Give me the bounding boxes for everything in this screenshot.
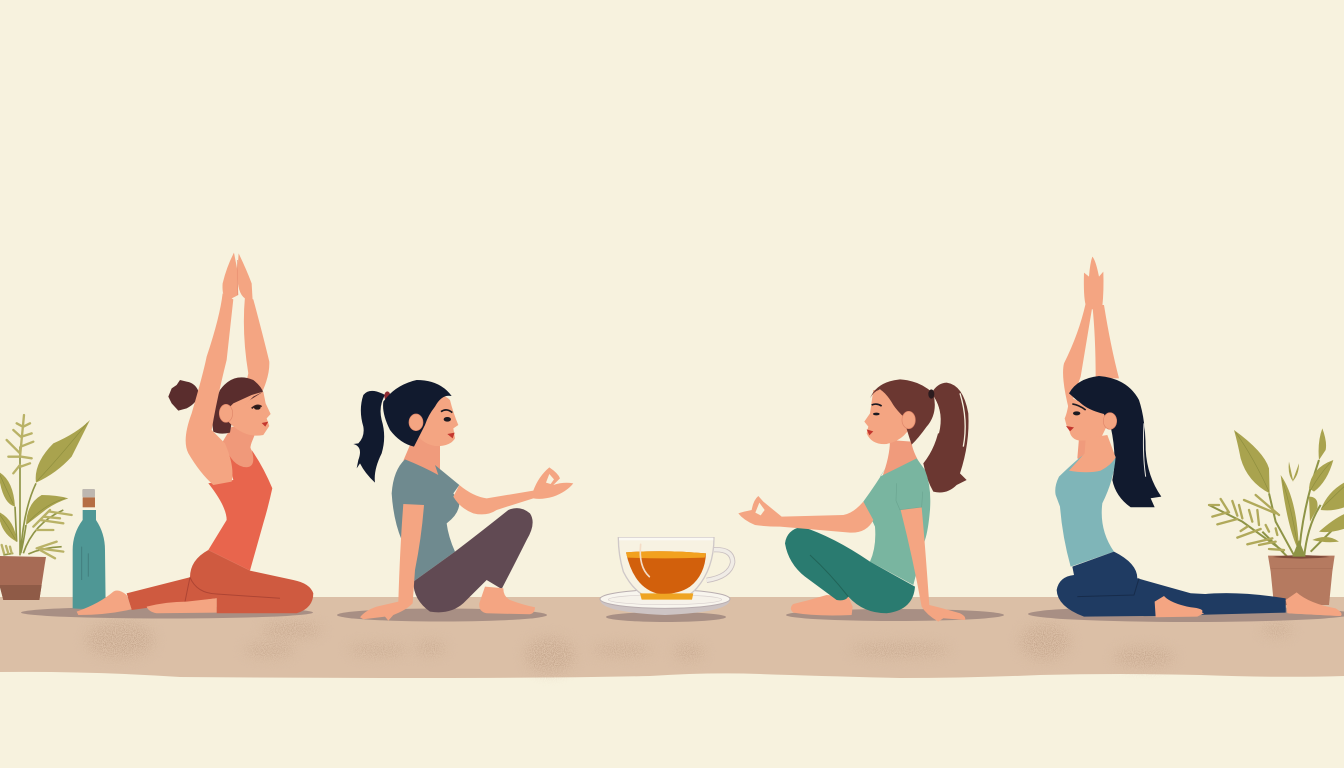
handle bbox=[707, 550, 733, 580]
neck bbox=[403, 433, 440, 480]
plant: left potted plant bbox=[0, 415, 90, 600]
blue top bbox=[1055, 450, 1116, 567]
face bbox=[1065, 397, 1107, 441]
figure 3: woman in mint shirt facing left bbox=[738, 379, 969, 622]
figure 2: woman in grey shirt facing right bbox=[353, 380, 573, 621]
near arm and hands bbox=[186, 293, 233, 485]
floor shadows bbox=[21, 606, 1344, 622]
hair bbox=[383, 380, 452, 447]
ponytail bbox=[923, 383, 969, 492]
feet bbox=[77, 591, 217, 615]
hair bbox=[870, 379, 935, 445]
leggings bbox=[413, 508, 533, 612]
neck bbox=[882, 440, 922, 478]
tea cup on saucer bbox=[600, 538, 733, 615]
floor band bbox=[0, 597, 1344, 678]
bottle bbox=[73, 489, 106, 609]
saucer bbox=[600, 591, 730, 615]
supporting arm and hand bbox=[901, 507, 965, 622]
plant: right potted plant bbox=[1202, 428, 1344, 616]
forward arm with mudra hand bbox=[738, 496, 873, 533]
mint shirt bbox=[863, 458, 930, 585]
foot bbox=[479, 587, 535, 614]
neck bbox=[222, 427, 258, 469]
arms and hands bbox=[1063, 303, 1092, 410]
green leggings bbox=[785, 527, 915, 613]
floor speckle texture bbox=[86, 622, 1292, 673]
coral top bbox=[208, 443, 272, 571]
back leg overlapping the pot bbox=[1202, 593, 1286, 613]
neck and chest bbox=[1069, 435, 1116, 472]
supporting arm and hand bbox=[360, 504, 424, 621]
glass bbox=[618, 538, 714, 598]
face bbox=[222, 392, 271, 436]
face bbox=[864, 390, 913, 444]
forward arm with mudra hand bbox=[453, 467, 573, 514]
foot bbox=[791, 595, 853, 615]
feet bbox=[1155, 596, 1204, 617]
hair bbox=[1069, 376, 1161, 507]
coral leggings bbox=[127, 550, 313, 613]
tea base bbox=[640, 593, 693, 600]
figure 1: woman in coral top with raised arms bbox=[77, 253, 313, 615]
grey shirt bbox=[392, 459, 459, 582]
back foot overlapping the pot bbox=[1286, 592, 1342, 616]
navy leggings bbox=[1057, 552, 1286, 617]
head hair and bun bbox=[168, 377, 263, 434]
figure 4: woman in light blue top with raised arms bbox=[1055, 257, 1340, 617]
ponytail bbox=[353, 391, 385, 483]
face bbox=[415, 390, 458, 446]
tea bbox=[626, 551, 706, 594]
far arm bbox=[233, 297, 269, 450]
